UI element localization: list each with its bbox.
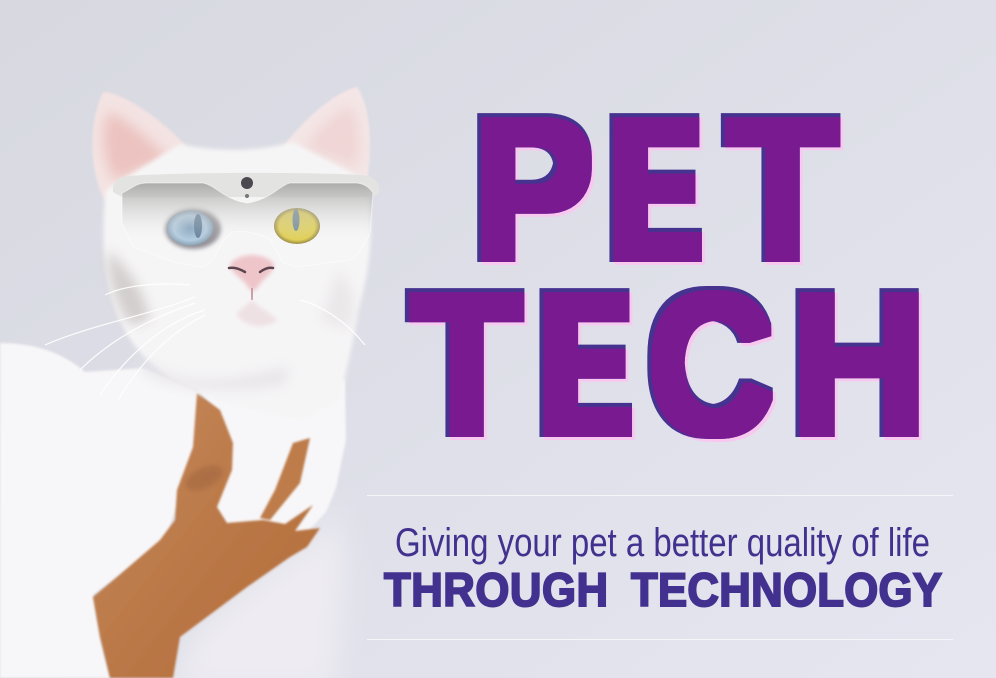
- cat head and neck: [104, 142, 371, 420]
- hand and forearm: [93, 393, 320, 678]
- tagline line two: [384, 564, 942, 616]
- title: PET TECH: H: [790, 254, 926, 476]
- bottom divider line: [367, 639, 953, 640]
- pale cat belly right of the hand: [170, 500, 345, 678]
- tagline line two: TECHNOLOGY: [631, 564, 942, 616]
- knuckle shadow: [182, 460, 226, 496]
- yellow eye: [274, 208, 320, 244]
- cat body: [0, 343, 200, 678]
- sensor dot: [245, 194, 249, 198]
- finger behind the paw: [260, 438, 310, 520]
- title: PET TECH: E: [613, 78, 699, 301]
- right cheek shading: [320, 270, 354, 330]
- title: PET TECH: T: [726, 79, 837, 301]
- right ear inner pink: [305, 105, 359, 168]
- left ear: [92, 92, 190, 205]
- title: PET TECH: P: [472, 79, 593, 301]
- left ear inner pink: [104, 112, 168, 180]
- title: PET TECH: T: [410, 254, 521, 476]
- lenses: [122, 183, 373, 267]
- neck shading: [140, 355, 290, 390]
- mouth: [236, 300, 278, 326]
- cheek shading: [108, 250, 150, 325]
- title: PET TECH: [410, 78, 926, 476]
- frame bar: [113, 173, 379, 197]
- nose: [229, 255, 274, 300]
- tagline line two: THROUGH: [384, 564, 608, 616]
- top divider line: [367, 495, 953, 496]
- blue eye: [165, 209, 221, 249]
- right ear: [282, 87, 370, 190]
- smart glasses: [113, 173, 379, 267]
- chest and paw fur: [190, 380, 346, 540]
- photo: white cat wearing smart glasses, held by a hand: [0, 87, 379, 678]
- whiskers: [45, 284, 365, 400]
- title: PET TECH: E: [543, 253, 629, 476]
- title: PET TECH: C: [647, 253, 773, 476]
- camera lens: [241, 177, 253, 189]
